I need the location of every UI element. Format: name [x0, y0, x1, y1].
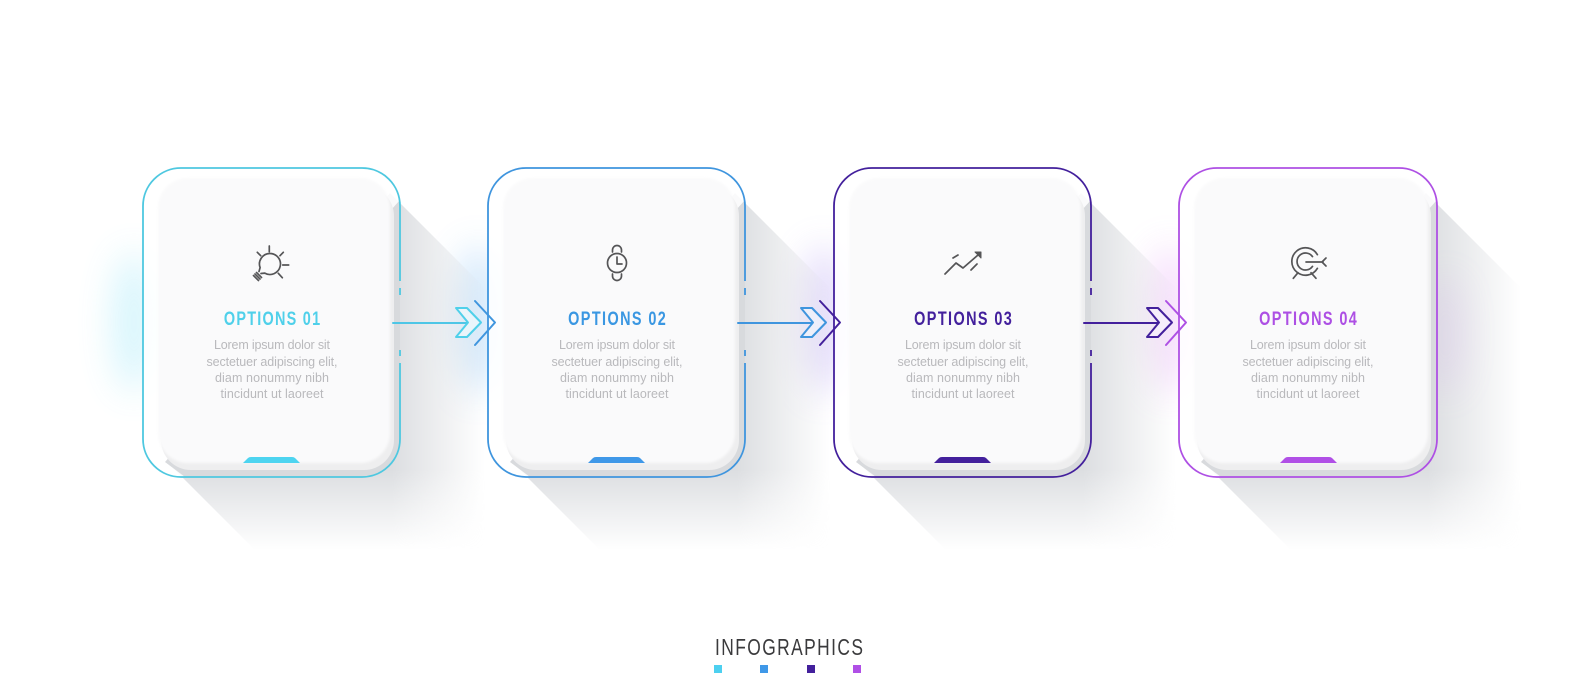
- accent tab: [934, 457, 991, 463]
- heading: OPTIONS 03: [914, 307, 1012, 330]
- accent tab: [243, 457, 300, 463]
- icon: target: [1292, 248, 1326, 278]
- long shadow 4: [1206, 193, 1566, 560]
- icon: light bulb: [254, 246, 289, 280]
- body text: diam nonummy nibh: [560, 371, 674, 385]
- outline: [834, 168, 1091, 477]
- glow: purple: [1146, 245, 1194, 395]
- heading: OPTIONS 01: [224, 307, 320, 330]
- body text: diam nonummy nibh: [215, 371, 329, 385]
- arrow 2: [738, 301, 840, 345]
- arrow 3: [1084, 301, 1186, 345]
- long shadow 1: [170, 193, 530, 560]
- glow: blue: [454, 245, 502, 395]
- panel: option 2: [488, 168, 745, 477]
- body text: tincidunt ut laoreet: [912, 387, 1015, 401]
- panel: option 4: [1179, 168, 1437, 477]
- outline: [143, 168, 400, 477]
- long shadow 3: [861, 193, 1221, 560]
- outline: [488, 168, 745, 477]
- body text: tincidunt ut laoreet: [566, 387, 669, 401]
- body text: sectetuer adipiscing elit,: [1242, 355, 1374, 369]
- icon: growth chart: [945, 252, 981, 274]
- glow: purple right: [1430, 275, 1462, 395]
- body text: Lorem ipsum dolor sit: [214, 338, 331, 352]
- heading: OPTIONS 04: [1259, 307, 1357, 330]
- body text: Lorem ipsum dolor sit: [1250, 338, 1367, 352]
- long shadow 2: [515, 193, 875, 560]
- legend squares: [714, 665, 861, 673]
- outline: [1179, 168, 1437, 477]
- body text: diam nonummy nibh: [906, 371, 1020, 385]
- body text: Lorem ipsum dolor sit: [905, 338, 1022, 352]
- body text: sectetuer adipiscing elit,: [898, 355, 1028, 369]
- footer title: INFOGRAPHICS: [715, 635, 863, 661]
- glow: cyan: [114, 252, 154, 392]
- body text: sectetuer adipiscing elit,: [552, 355, 682, 369]
- body text: sectetuer adipiscing elit,: [206, 355, 338, 369]
- glow: indigo: [800, 245, 848, 395]
- icon: watch: [608, 246, 626, 280]
- body text: tincidunt ut laoreet: [1256, 387, 1360, 401]
- panel: option 1: [143, 168, 400, 477]
- accent tab: [1280, 457, 1337, 463]
- body text: tincidunt ut laoreet: [220, 387, 324, 401]
- body text: Lorem ipsum dolor sit: [559, 338, 676, 352]
- panel: option 3: [834, 168, 1091, 477]
- arrow 1: [393, 301, 495, 345]
- accent tab: [588, 457, 645, 463]
- heading: OPTIONS 02: [568, 307, 666, 330]
- body text: diam nonummy nibh: [1251, 371, 1365, 385]
